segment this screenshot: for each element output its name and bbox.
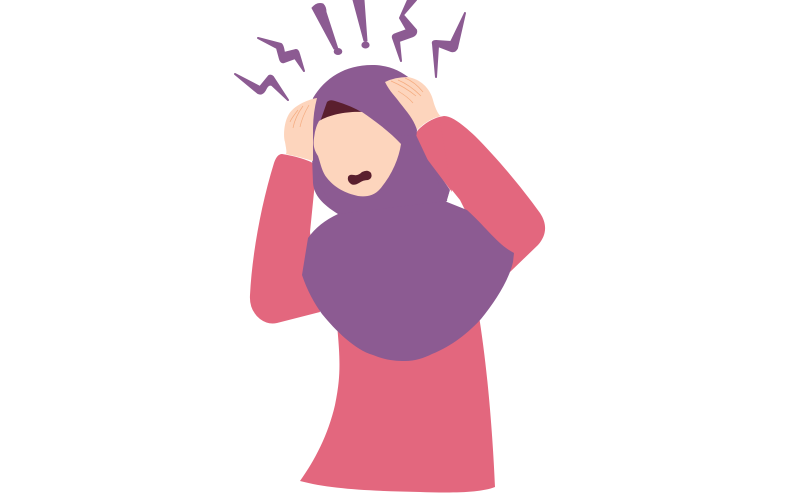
icon: exclamation dot left bbox=[334, 48, 342, 54]
left hand bbox=[284, 98, 317, 161]
right arm sleeve bbox=[415, 116, 545, 272]
finger lines bbox=[391, 78, 423, 103]
icon: lightning bolt far left bbox=[235, 74, 288, 100]
finger lines bbox=[290, 105, 309, 128]
mouth bbox=[348, 171, 372, 185]
icon: lightning bolt upper left bbox=[258, 38, 304, 71]
body: pink dress bbox=[300, 310, 495, 492]
stress marks bbox=[235, 0, 465, 100]
left arm sleeve bbox=[250, 154, 320, 324]
icon: exclamation mark right bbox=[353, 0, 367, 41]
face bbox=[314, 112, 401, 196]
hair under hood bbox=[320, 100, 363, 122]
hood: white gap at neck right bbox=[447, 190, 462, 206]
hood lower neck fill bbox=[316, 135, 447, 214]
right arm sleeve overlap bbox=[415, 120, 452, 192]
cape: draped hijab bbox=[302, 190, 514, 361]
icon: exclamation mark left bbox=[312, 4, 338, 49]
right hand bbox=[385, 77, 441, 130]
icon: exclamation dot right bbox=[362, 42, 369, 48]
icon: lightning bolt upper right bbox=[393, 0, 416, 61]
icon: lightning bolt far right bbox=[433, 13, 465, 77]
hood: head covering bbox=[311, 65, 450, 214]
